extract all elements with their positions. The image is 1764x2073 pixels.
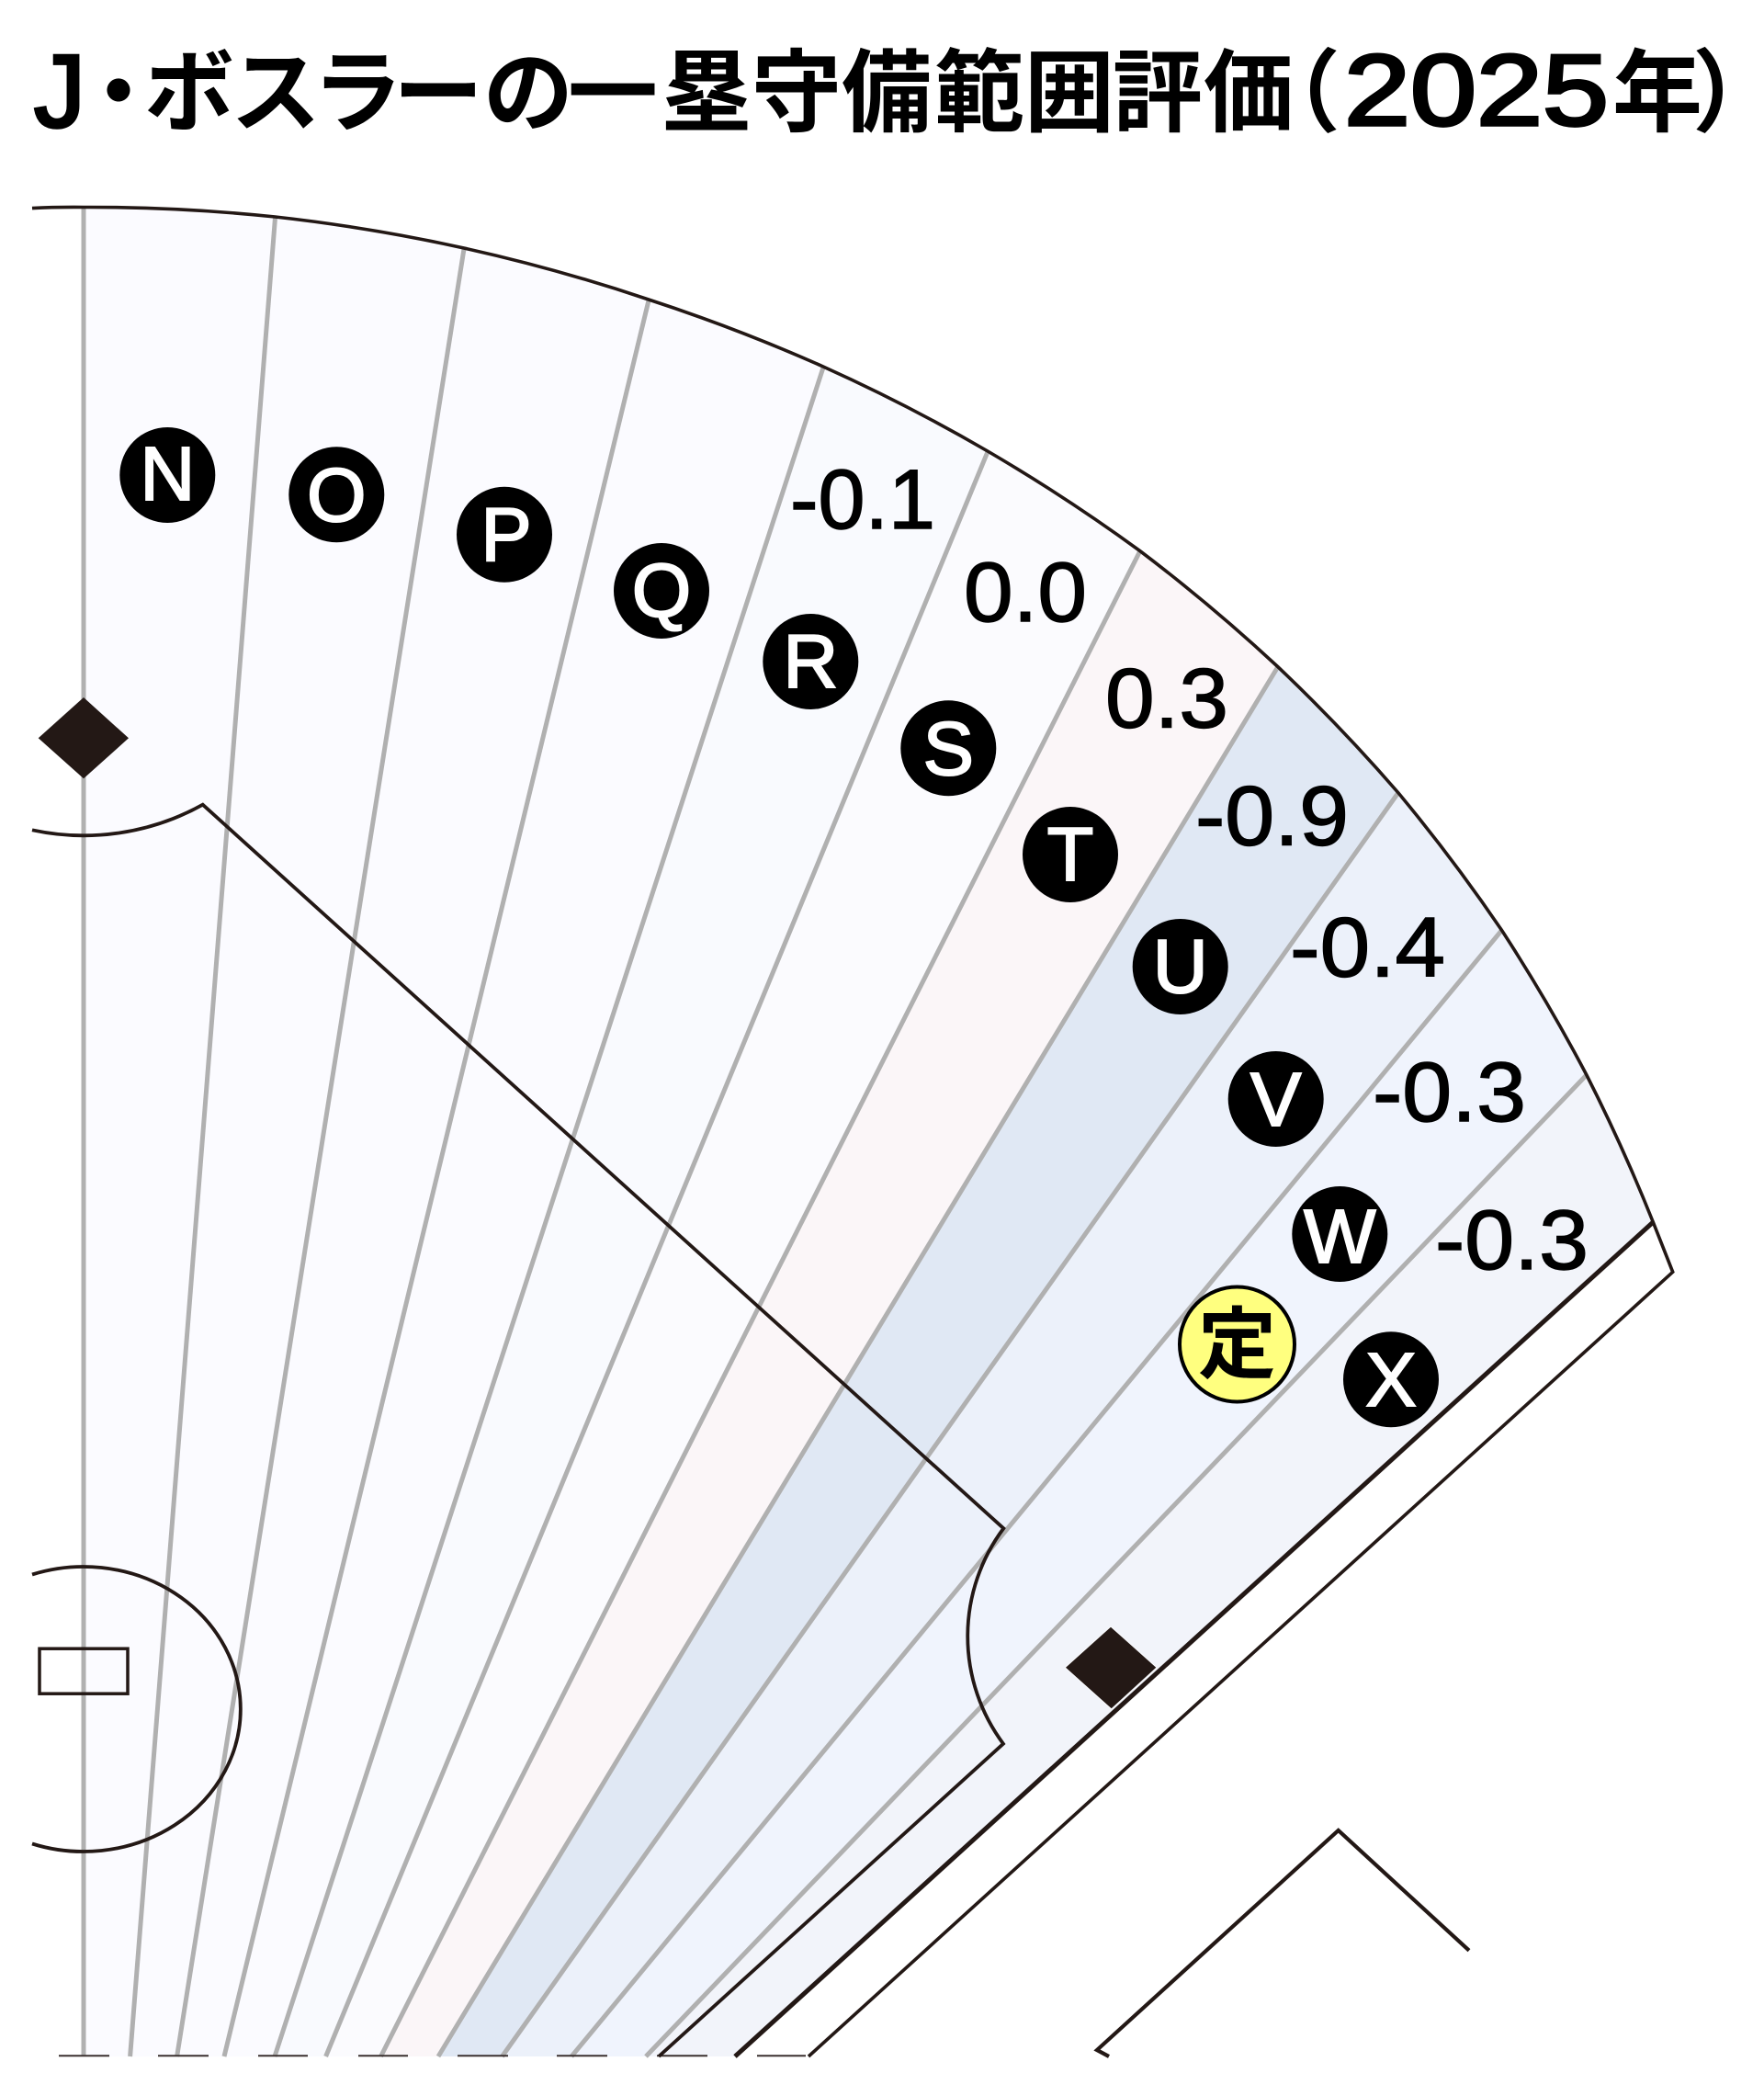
fielder position marker bbox=[1180, 1286, 1295, 1402]
zone markers: U bbox=[1153, 923, 1208, 1009]
pitcher's plate bbox=[40, 1648, 128, 1694]
field zones: shaded sectors bbox=[84, 208, 1653, 2056]
zone values: 0.3 bbox=[1105, 652, 1228, 746]
zone markers: P bbox=[481, 492, 532, 577]
zone values: 0.0 bbox=[964, 546, 1087, 640]
zone values: -0.9 bbox=[1195, 769, 1349, 863]
fielder position marker: 定 bbox=[1198, 1302, 1276, 1389]
zone markers: V bbox=[1250, 1057, 1301, 1142]
foul line bbox=[735, 1222, 1653, 2056]
sector divider lines bbox=[84, 208, 1587, 2056]
bottom edge dashes bbox=[59, 2055, 806, 2056]
zone markers bbox=[119, 427, 1439, 1427]
zone values: -0.4 bbox=[1290, 901, 1445, 995]
zone values: -0.1 bbox=[790, 453, 935, 547]
zone markers: T bbox=[1047, 811, 1093, 897]
zone markers: W bbox=[1304, 1194, 1376, 1279]
zone markers: N bbox=[140, 431, 195, 516]
foul territory outline bbox=[1097, 1830, 1469, 2056]
infield dirt outline bbox=[32, 805, 1003, 2056]
second base bbox=[39, 697, 129, 778]
zone markers: X bbox=[1365, 1337, 1417, 1422]
title bbox=[34, 34, 1764, 149]
first base bbox=[1066, 1627, 1156, 1708]
title: J bbox=[34, 34, 85, 149]
pitcher's mound bbox=[32, 1567, 241, 1852]
zone markers: S bbox=[923, 706, 974, 791]
title: ・ボスラーの一塁守備範囲評価 bbox=[74, 42, 1294, 143]
zone values bbox=[790, 453, 1589, 1287]
zone values: -0.3 bbox=[1435, 1194, 1589, 1287]
zone markers: O bbox=[307, 452, 367, 538]
zone markers: R bbox=[783, 618, 838, 704]
title: （ bbox=[1250, 42, 1340, 143]
zone values: -0.3 bbox=[1373, 1046, 1526, 1139]
zone markers: Q bbox=[632, 548, 691, 633]
title: 2025 bbox=[1344, 34, 1609, 147]
